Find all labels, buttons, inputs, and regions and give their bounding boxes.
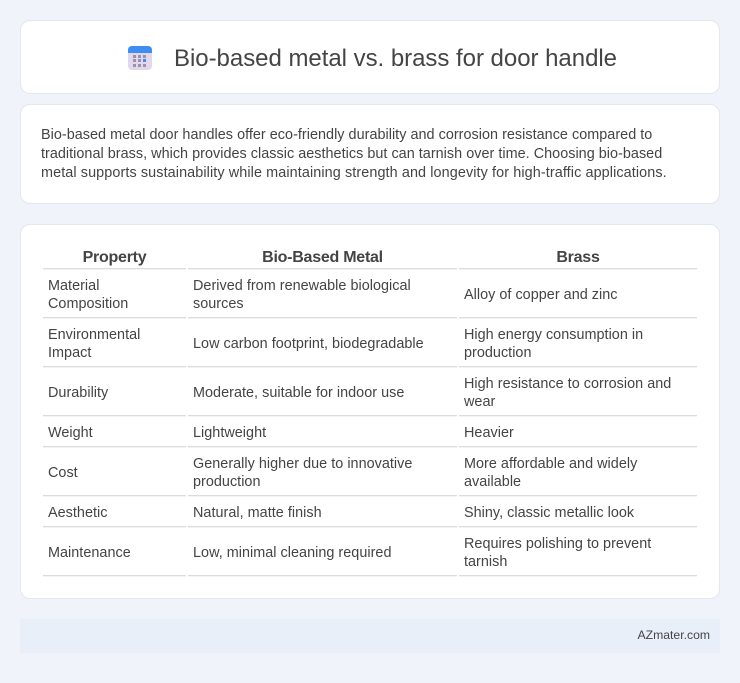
summary paragraph: traditional brass, which provides classic aesthetics but can tarnish over time. Choosing bio-based [41,146,662,162]
comparison table: Low, minimal cleaning required [193,545,391,561]
row: Environmental Impact [48,327,140,361]
row: Environmental Impact: Impact [48,345,91,361]
summary paragraph: Bio-based metal door handles offer eco-friendly durability and corrosion resistance compared to [41,127,652,143]
comparison table: More affordable and widely [464,456,637,472]
comparison table: Generally higher due to innovative [193,456,412,472]
row: Material Composition [48,278,128,312]
comparison table: Derived from renewable biological [193,278,411,294]
comparison table: available [464,474,521,490]
comparison table: production [464,345,532,361]
comparison table: wear [464,394,495,410]
comparison table: High resistance to corrosion and [464,376,671,392]
panel: summary text [20,104,720,204]
comparison table: Requires polishing to prevent [464,536,651,552]
comparison table: High energy consumption in [464,327,643,343]
comparison table: sources [193,296,244,312]
row: Aesthetic: Aesthetic [48,505,107,521]
comparison table: Alloy of copper and zinc [464,287,618,303]
comparison table: Moderate, suitable for indoor use [193,385,404,401]
row: Durability: Durability [48,385,108,401]
comparison table: Low carbon footprint, biodegradable [193,336,424,352]
row: Environmental Impact: Environmental [48,327,140,343]
summary paragraph [41,127,667,181]
row: Maintenance: Maintenance [48,545,131,561]
summary paragraph: metal supports sustainability while maintaining strength and longevity for high-traffic applications. [41,165,667,181]
comparison table: Shiny, classic metallic look [464,505,634,521]
footer brand text: AZmater.com [638,628,710,642]
footer bar [20,619,720,653]
icon: calendar [128,46,152,70]
comparison table: production [193,474,261,490]
comparison table: Heavier [464,425,514,441]
comparison table: tarnish [464,554,507,570]
row: Weight: Weight [48,425,93,441]
panel: comparison table card [20,224,720,599]
column header: Bio-Based Metal: Bio-Based Metal [262,249,383,266]
panel: title [20,20,720,94]
row: Material Composition: Composition [48,296,128,312]
comparison table: Lightweight [193,425,266,441]
comparison table: Natural, matte finish [193,505,322,521]
row: Material Composition: Material [48,278,99,294]
heading: Bio-based metal vs. brass for door handle [174,45,617,72]
column header: Brass: Brass [556,249,600,266]
column header: Property: Property [83,249,146,266]
row: Cost: Cost [48,465,78,481]
